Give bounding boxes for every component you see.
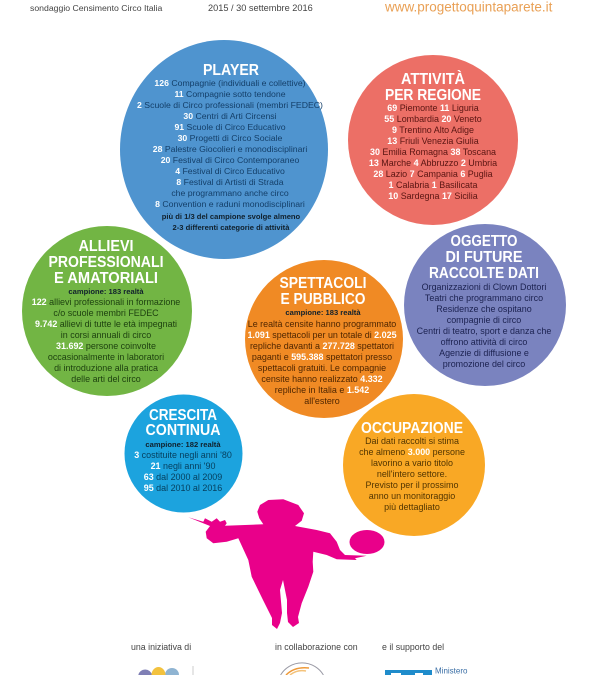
panel: crescita continua: 21 negli anni '90 — [151, 461, 215, 471]
panel: attività per regione: 13 Marche 4 Abbruzzo 2 Umbria — [369, 158, 497, 168]
panel: occupazione: nell'intero settore. — [377, 469, 447, 479]
footer: support label: e il supporto del — [382, 642, 444, 652]
panel: attività per regione: 10 Sardegna 17 Sicilia — [388, 191, 478, 201]
logo: initiative — [138, 666, 194, 675]
panel: crescita continua: 3 costituite negli anni '80 — [134, 450, 232, 460]
panel: oggetto di future raccolte dati: promozione del circo — [443, 359, 525, 369]
panel: allievi professionali e amatoriali: ALLIEVI — [78, 238, 134, 255]
panel: allievi professionali e amatoriali: campione: 183 realtà — [68, 287, 144, 296]
panel: allievi professionali e amatoriali: di introduzione alla pratica — [54, 363, 158, 373]
panel: spettacoli e pubblico: campione: 183 realtà — [285, 308, 361, 317]
panel: spettacoli e pubblico: repliche davanti a 277.728 spettatori — [250, 341, 394, 351]
header: survey source: sondaggio Censimento Circo Italia — [30, 3, 162, 13]
panel: occupazione: lavorino a vario titolo — [371, 458, 453, 468]
panel: allievi professionali e amatoriali: 31.692 persone coinvolte — [56, 341, 156, 351]
footer: collaboration label: in collaborazione con — [275, 642, 358, 652]
panel: attività per regione: ATTIVITÀ — [401, 71, 465, 88]
panel: oggetto di future raccolte dati: Organizzazioni di Clown Dottori — [422, 282, 546, 292]
header: survey period: 2015 / 30 settembre 2016 — [208, 3, 313, 13]
panel: allievi professionali e amatoriali: occasionalmente in laboratori — [48, 352, 164, 362]
panel: attività per regione: 30 Emilia Romagna 38 Toscana — [370, 147, 496, 157]
logo: ministero — [385, 666, 468, 675]
panel: occupazione: che almeno 3.000 persone — [359, 447, 465, 457]
panel: player: 2-3 differenti categorie di attività — [173, 223, 290, 232]
panel: player: 126 Compagnie (individuali e collettive) — [154, 78, 306, 88]
illustration: juggler silhouette — [188, 499, 384, 629]
panel: spettacoli e pubblico: paganti e 595.388 spettatori presso — [252, 352, 392, 362]
panel: spettacoli e pubblico: repliche in Italia e 1.542 — [275, 385, 369, 395]
panel: player: più di 1/3 del campione svolge almeno — [162, 212, 301, 221]
panel: oggetto di future raccolte dati: Centri di teatro, sport e danza che — [417, 326, 551, 336]
panel: spettacoli e pubblico: E PUBBLICO — [280, 291, 366, 308]
panel: spettacoli e pubblico — [245, 260, 403, 418]
panel: occupazione: Dai dati raccolti si stima — [365, 436, 459, 446]
panel: occupazione — [343, 394, 485, 536]
panel: attività per regione — [348, 55, 518, 225]
panel: attività per regione: 55 Lombardia 20 Veneto — [384, 114, 482, 124]
panel: crescita continua: CONTINUA — [146, 422, 220, 439]
panel: player: 30 Centri di Arti Circensi — [183, 111, 277, 121]
panel: player: 11 Compagnie sotto tendone — [174, 89, 286, 99]
panel: player: 91 Scuole di Circo Educativo — [174, 122, 286, 132]
panel: allievi professionali e amatoriali: 9.742 allievi di tutte le età impegnati — [35, 319, 177, 329]
panel: occupazione: OCCUPAZIONE — [361, 420, 463, 437]
panel: attività per regione: 9 Trentino Alto Adige — [392, 125, 474, 135]
panel: player: 8 Festival di Artisti di Strada — [176, 177, 284, 187]
panel: occupazione: Previsto per il prossimo — [366, 480, 458, 490]
panel: spettacoli e pubblico: all'estero — [304, 396, 340, 406]
panel: player: che programmano anche circo — [171, 188, 289, 198]
panel: crescita continua: CRESCITA — [149, 407, 217, 424]
panel: allievi professionali e amatoriali: c/o scuole membri FEDEC — [53, 308, 159, 318]
panel: allievi professionali e amatoriali — [22, 226, 192, 396]
footer: initiative label: una iniziativa di — [131, 642, 191, 652]
panel: crescita continua: campione: 182 realtà — [145, 440, 221, 449]
panel: oggetto di future raccolte dati — [404, 224, 566, 386]
panel: spettacoli e pubblico: spettacoli gratuiti. Le compagnie — [258, 363, 386, 373]
panel: allievi professionali e amatoriali: PROFESSIONALI — [48, 254, 164, 271]
panel: attività per regione: 28 Lazio 7 Campania 6 Puglia — [373, 169, 493, 179]
logo: collaboration — [281, 663, 323, 675]
panel: attività per regione: 69 Piemonte 11 Liguria — [387, 103, 479, 113]
panel: player: 8 Convention e raduni monodisciplinari — [155, 199, 305, 209]
panel: oggetto di future raccolte dati: compagnie di circo — [447, 315, 521, 325]
panel: allievi professionali e amatoriali: E AMATORIALI — [54, 270, 158, 287]
panel: oggetto di future raccolte dati: Agenzie di diffusione e — [439, 348, 529, 358]
panel: attività per regione: 1 Calabria 1 Basilicata — [389, 180, 478, 190]
panel: oggetto di future raccolte dati: RACCOLTE DATI — [429, 265, 539, 282]
panel: oggetto di future raccolte dati: Teatri che programmano circo — [425, 293, 543, 303]
panel: allievi professionali e amatoriali: in corsi annuali di circo — [61, 330, 151, 340]
panel: player: 2 Scuole di Circo professionali (membri FEDEC) — [137, 100, 323, 110]
panel: spettacoli e pubblico: SPETTACOLI — [280, 275, 366, 292]
panel: oggetto di future raccolte dati: OGGETTO — [450, 233, 518, 250]
panel: attività per regione: 13 Friuli Venezia Giulia — [387, 136, 479, 146]
panel: allievi professionali e amatoriali: delle arti del circo — [71, 374, 141, 384]
panel: player: 28 Palestre Giocolieri e monodisciplinari — [153, 144, 307, 154]
panel: oggetto di future raccolte dati: offrono attività di circo — [441, 337, 527, 347]
panel: crescita continua: 95 dal 2010 al 2016 — [144, 483, 222, 493]
panel: occupazione: più dettagliato — [384, 502, 440, 512]
panel: player: 4 Festival di Circo Educativo — [175, 166, 285, 176]
panel: occupazione: anno un monitoraggio — [369, 491, 455, 501]
panel: spettacoli e pubblico: Le realtà censite hanno programmato — [248, 319, 396, 329]
panel: oggetto di future raccolte dati: DI FUTURE — [446, 249, 522, 266]
panel: allievi professionali e amatoriali: 122 allievi professionali in formazione — [32, 297, 180, 307]
panel: spettacoli e pubblico: censite hanno realizzato 4.332 — [261, 374, 383, 384]
panel: oggetto di future raccolte dati: Residenze che ospitano — [436, 304, 532, 314]
panel: player — [120, 40, 328, 259]
panel: player: 30 Progetti di Circo Sociale — [178, 133, 283, 143]
panel: crescita continua — [124, 394, 242, 512]
panel: player: PLAYER — [203, 62, 259, 79]
panel: spettacoli e pubblico: 1.091 spettacoli per un totale di 2.025 — [247, 330, 397, 340]
panel: attività per regione: PER REGIONE — [385, 87, 481, 104]
panel: crescita continua: 63 dal 2000 al 2009 — [144, 472, 222, 482]
panel: player: 20 Festival di Circo Contemporaneo — [161, 155, 299, 165]
